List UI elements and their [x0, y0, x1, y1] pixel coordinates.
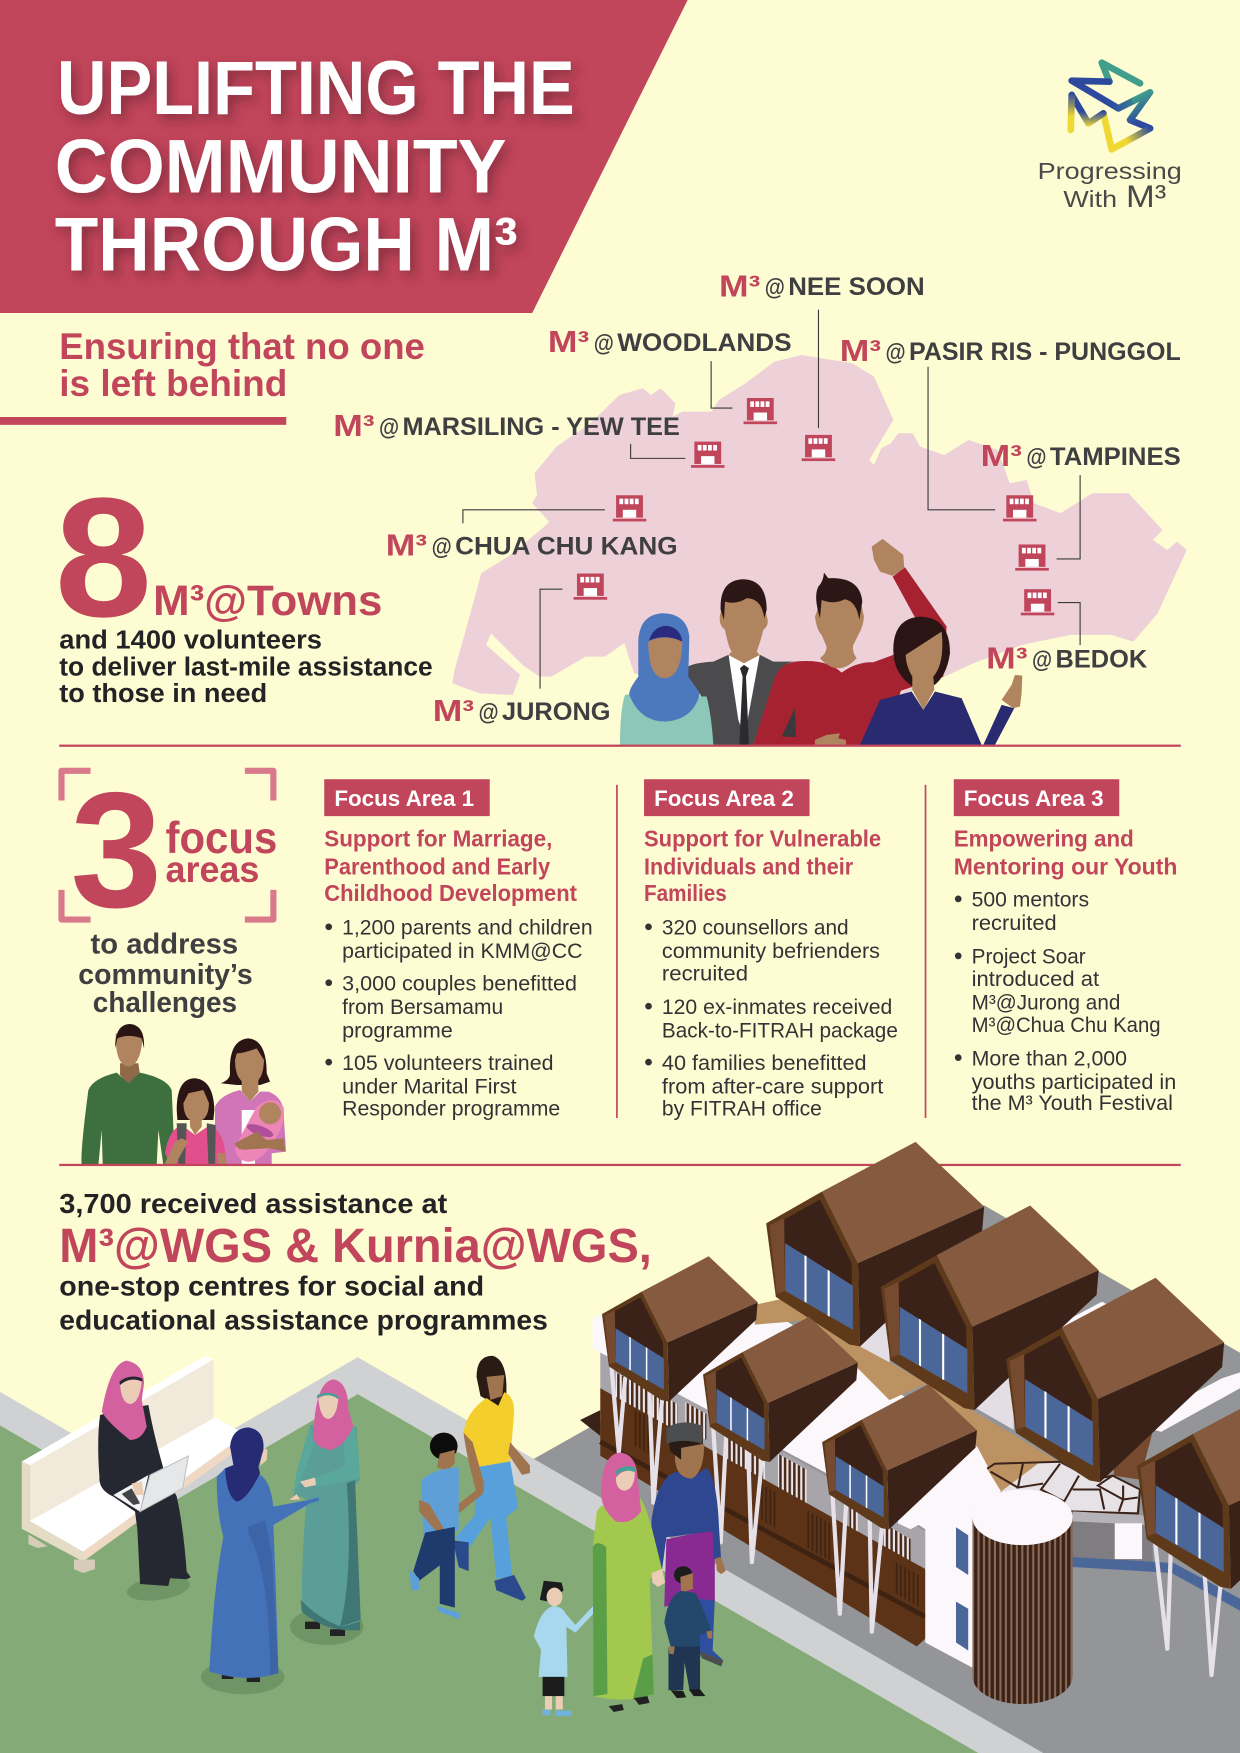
woman in blue hijab [620, 613, 713, 745]
focus area 3: M³@Jurong and [972, 991, 1120, 1015]
title: UPLIFTING THE [57, 46, 575, 131]
title [55, 46, 575, 288]
illustration: family by building [593, 1422, 726, 1712]
label: Chua Chu Kang: M³ [386, 530, 427, 563]
label: Bedok [986, 643, 1147, 676]
white roof slab [593, 1305, 1022, 1529]
focus area 3: the M³ Youth Festival [972, 1091, 1173, 1115]
bottom text block: M³@WGS & Kurnia@WGS, [59, 1219, 652, 1273]
label: Pasir Ris - Punggol: PASIR RIS - PUNGGOL [909, 339, 1181, 366]
ground: road [526, 1205, 1240, 1753]
focus area 1: 1,200 parents and children [342, 916, 593, 940]
side wings [860, 1291, 1240, 1480]
focus area 1: Parenthood and Early [324, 853, 550, 879]
subtitle [0, 326, 425, 425]
focus area 3: More than 2,000 [972, 1046, 1127, 1070]
label: Marsiling - Yew Tee [333, 410, 680, 443]
boy in blue [409, 1433, 484, 1619]
label: Woodlands: @ [594, 330, 614, 356]
text: to address challenges: challenges [93, 987, 237, 1019]
location icons [574, 398, 1054, 615]
label: Pasir Ris - Punggol [840, 335, 1181, 368]
label: Woodlands: M³ [548, 326, 589, 359]
focus area 2: by FITRAH office [662, 1097, 822, 1121]
stair tower [898, 1454, 1001, 1668]
focus area 2: Individuals and their [644, 853, 853, 879]
label: Nee Soon: M³ [719, 270, 760, 303]
illustration: WGS building [580, 1142, 1240, 1704]
focus area 3: Project Soar [972, 945, 1086, 969]
divider top [59, 745, 1181, 747]
focus area 1: participated in KMM@CC [342, 939, 583, 963]
label: Chua Chu Kang: @ [432, 534, 452, 560]
illustration: family [81, 1024, 286, 1165]
illustration: mother son and daughter walking [409, 1356, 597, 1716]
stat: 8 M3 towns: to those in need [59, 680, 267, 708]
text: to address challenges [78, 929, 253, 1019]
focus area 1: from Bersamamu [342, 995, 503, 1019]
ground: lawn [0, 1394, 978, 1753]
ground floor wall [580, 1350, 925, 1646]
focus area 2: community befrienders [662, 939, 880, 963]
focus area 2 [644, 779, 898, 1121]
focus area 2: Support for Vulnerable [644, 825, 881, 851]
man in green [81, 1024, 175, 1165]
logo: Progressing With M3: With [1063, 186, 1117, 212]
focus area 3: recruited [972, 911, 1057, 935]
label: Tampines: @ [1026, 444, 1047, 470]
girl in light blue [534, 1581, 597, 1716]
label: Marsiling - Yew Tee: M³ [333, 410, 375, 443]
stat: 3 focus areas [70, 758, 277, 942]
divider bottom [59, 1164, 1181, 1166]
label: Jurong: M³ [433, 695, 474, 728]
subtitle: is left behind [59, 363, 287, 404]
stat: 8 M3 towns: to deliver last-mile assistance [59, 653, 433, 681]
stat: 8 M3 towns: and 1400 volunteers [59, 626, 322, 654]
connector lines [463, 310, 1080, 689]
logo: Progressing With M3: Progressing [1038, 158, 1182, 184]
entrance canopy [974, 1462, 1240, 1611]
text: to address challenges: to address [91, 929, 238, 961]
man in red [753, 539, 947, 745]
focus area 3: M³@Chua Chu Kang [972, 1013, 1161, 1037]
focus area 3: introduced at [972, 967, 1099, 991]
bottom text block [59, 1188, 652, 1335]
focus area 1: 3,000 couples benefitted [342, 972, 577, 996]
focus area 2: from after-care support [662, 1074, 883, 1098]
label: Jurong: JURONG [502, 699, 610, 726]
woman on laptop [98, 1361, 191, 1604]
stat: 8 M3 towns: M³@Towns [153, 578, 382, 625]
focus area 1: Responder programme [342, 1097, 560, 1121]
subtitle: Ensuring that no one [59, 326, 425, 367]
label: Bedok: M³ [986, 643, 1028, 676]
bottom text block: educational assistance programmes [59, 1304, 548, 1335]
title: COMMUNITY [55, 124, 507, 209]
ground: pale walkway [0, 1357, 1043, 1753]
woman in teal [289, 1379, 363, 1645]
label: Jurong: @ [479, 699, 499, 725]
focus area 1 [324, 779, 593, 1121]
icon: M3 logo mark [1071, 63, 1150, 149]
courtyard path [755, 1299, 1056, 1492]
label: Nee Soon [719, 270, 925, 303]
map of Singapore [452, 355, 1187, 707]
cylinder tower [972, 1490, 1073, 1704]
label: Nee Soon: NEE SOON [788, 274, 925, 301]
focus area 2: 120 ex-inmates received [662, 995, 892, 1019]
girl with backpack [164, 1078, 227, 1165]
bottom text block: 3,700 received assistance at [59, 1188, 447, 1219]
stat: 3 focus areas: 3 [70, 758, 162, 942]
focus area 3: Focus Area 3 [964, 786, 1104, 811]
focus area 2: Families [644, 880, 727, 906]
label: Nee Soon: @ [765, 274, 785, 300]
focus area 1: under Marital First [342, 1074, 517, 1098]
bottom text block: one-stop centres for social and [59, 1271, 484, 1302]
label: Pasir Ris - Punggol: M³ [840, 335, 881, 368]
stat: 3 focus areas: focus [165, 814, 277, 863]
woman in yellow [453, 1356, 530, 1601]
header banner [0, 0, 688, 313]
focus area 3: Empowering and [954, 825, 1134, 851]
title: THROUGH M³ [55, 203, 518, 288]
focus area 1: Childhood Development [324, 880, 577, 906]
focus area 1: Focus Area 1 [334, 786, 474, 811]
label: Tampines [981, 440, 1181, 473]
focus area 2: 40 families benefitted [662, 1051, 867, 1075]
label: Bedok: BEDOK [1056, 646, 1147, 673]
illustration: three women [98, 1361, 363, 1694]
woman with baby [215, 1038, 286, 1165]
label: Chua Chu Kang: CHUA CHU KANG [455, 534, 678, 561]
brackets [61, 771, 273, 920]
focus area 2: Focus Area 2 [654, 786, 794, 811]
father [650, 1422, 726, 1666]
stat: 8 M3 towns: 8 [55, 463, 152, 653]
focus area 3: 500 mentors [972, 888, 1089, 912]
focus area 3: Mentoring our Youth [954, 853, 1177, 879]
stat: 3 focus areas: areas [165, 849, 259, 890]
woman in navy [860, 617, 1022, 745]
label: Tampines: TAMPINES [1050, 444, 1181, 471]
label: Chua Chu Kang [386, 530, 678, 563]
stilts [612, 1368, 1223, 1675]
woman in blue seen from behind [201, 1427, 319, 1694]
label: Pasir Ris - Punggol: @ [886, 339, 906, 365]
label: Tampines: M³ [981, 440, 1022, 473]
focus area 3: youths participated in [972, 1070, 1176, 1094]
label: Marsiling - Yew Tee: @ [379, 414, 399, 440]
label: Jurong [433, 695, 610, 728]
logo: Progressing With M3 [1038, 63, 1182, 214]
illustration: bench [22, 1356, 245, 1573]
man in suit [683, 579, 795, 745]
label: Woodlands: WOODLANDS [617, 330, 792, 357]
focus area 3 [954, 779, 1177, 1115]
text: to address challenges: community’s [78, 959, 253, 991]
focus area 1: 105 volunteers trained [342, 1051, 553, 1075]
focus area 2: Back-to-FITRAH package [662, 1018, 898, 1042]
son [664, 1566, 712, 1698]
stat: 8 M3 towns [55, 463, 433, 708]
focus area 2: recruited [662, 961, 748, 985]
houses [766, 1142, 984, 1346]
focus area 1: programme [342, 1018, 453, 1042]
focus area 1: Support for Marriage, [324, 825, 552, 851]
focus area 2: 320 counsellors and [662, 916, 849, 940]
illustration: community group [620, 539, 1022, 745]
logo: Progressing With M3: M³ [1126, 179, 1166, 214]
label: Woodlands [548, 326, 792, 359]
mother in green [593, 1453, 665, 1712]
label: Bedok: @ [1032, 646, 1052, 672]
label: Marsiling - Yew Tee: MARSILING - YEW TEE [403, 414, 680, 441]
